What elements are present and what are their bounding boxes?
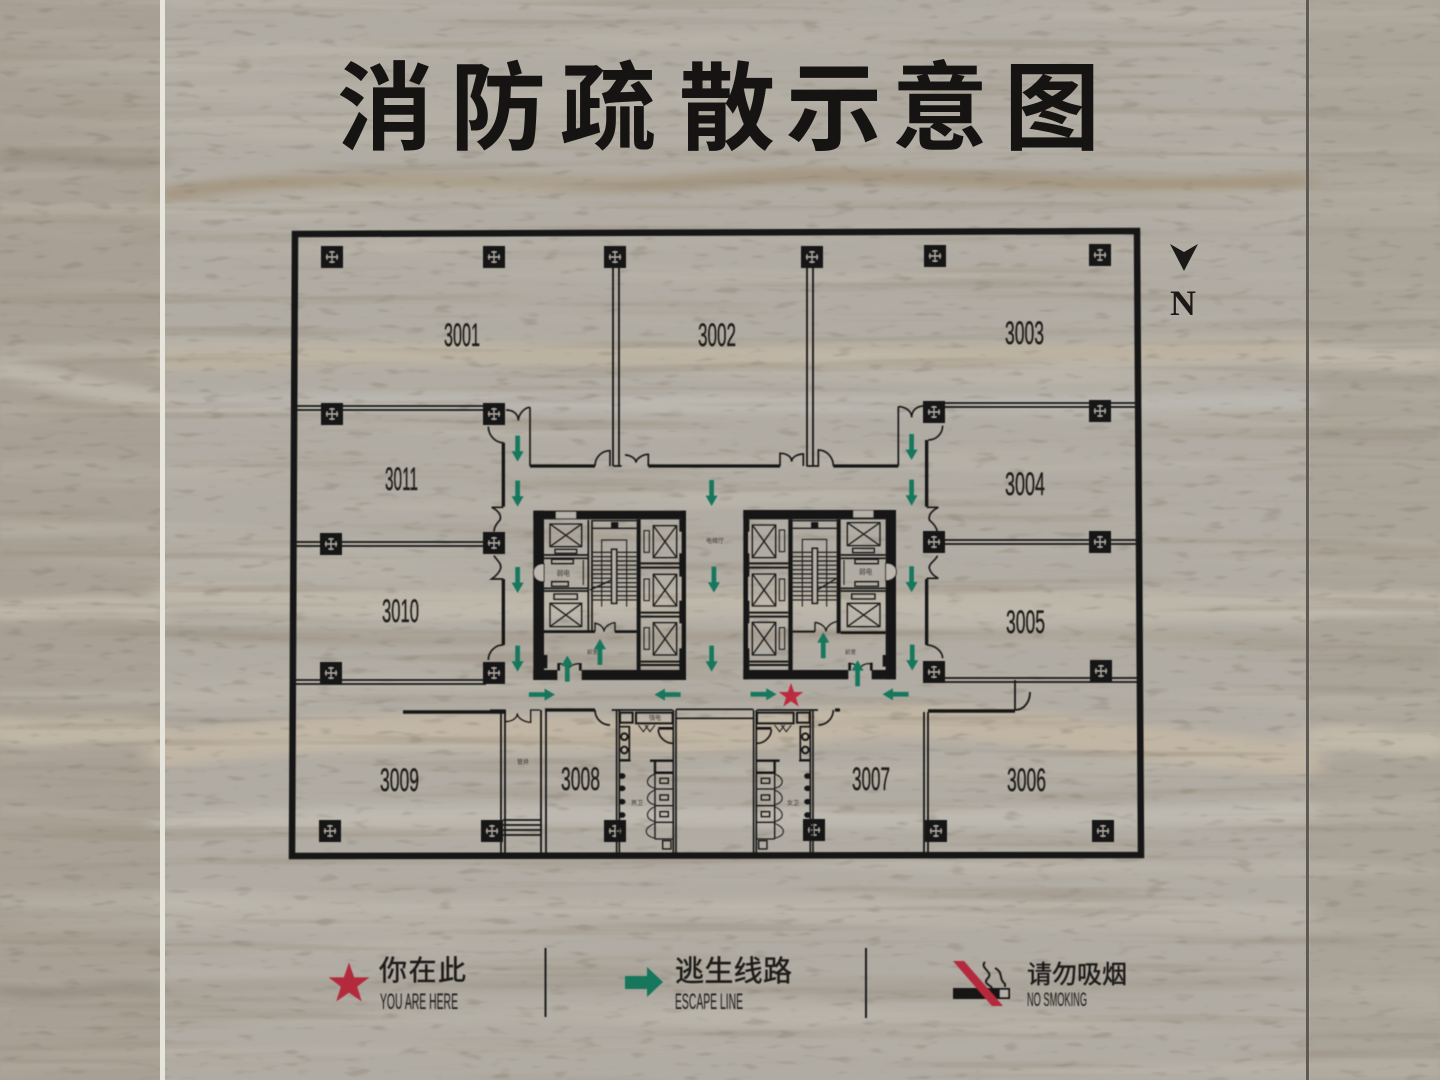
core right top notch <box>853 511 873 517</box>
marble bands <box>0 157 1440 993</box>
left corridor arrows <box>512 436 720 701</box>
legend no smoking chinese: 请勿吸烟 <box>1027 955 1127 991</box>
room 3003: 3003 <box>1005 315 1044 351</box>
north arrowhead <box>1170 244 1198 271</box>
no smoking smoke <box>984 962 1005 988</box>
women's room label: 女卫 <box>787 798 799 807</box>
room 3008: 3008 <box>561 761 600 797</box>
core right labels: 弱电 <box>859 566 873 576</box>
you are here star on plan <box>779 683 803 707</box>
core left thick walls <box>533 511 686 680</box>
floor plan <box>292 231 1141 856</box>
shaft label: 管井 <box>517 757 529 766</box>
room 3006: 3006 <box>1007 762 1046 798</box>
utility label: 强电 <box>649 713 661 722</box>
compass: north indicator <box>1170 244 1198 323</box>
core left side door <box>533 564 544 582</box>
right wall strip <box>1310 0 1440 1080</box>
no smoking cigarette <box>953 988 1010 999</box>
lower corridor wall and restrooms <box>490 709 840 853</box>
lift lobby label: 电梯厅 <box>706 536 724 545</box>
room 3010: 3010 <box>382 593 419 629</box>
no smoking slash <box>953 961 1003 1006</box>
lobby label left: 前室 <box>587 648 599 656</box>
restroom right fixtures <box>754 710 818 853</box>
room numbers: 3011 <box>385 461 418 497</box>
left wall strip <box>0 0 160 1080</box>
corridor walls and doors, left half <box>488 407 720 660</box>
lower corridor wall <box>490 710 540 722</box>
legend: no smoking: NO SMOKING <box>1027 990 1087 1011</box>
north letter: N <box>1170 283 1196 323</box>
legend: you are here: YOU ARE HERE <box>380 989 458 1014</box>
core right thick walls <box>743 510 896 679</box>
legend escape arrow <box>625 967 663 997</box>
elevators left <box>550 524 677 655</box>
legend star icon <box>329 962 369 1001</box>
right corridor arrows <box>751 434 918 700</box>
corridor walls and doors, right half <box>720 406 943 658</box>
partition walls <box>295 257 1137 855</box>
room 3004: 3004 <box>1005 466 1045 502</box>
core: right elevator and stair block <box>743 510 896 679</box>
no smoking filter tip <box>1000 990 1008 997</box>
restroom left fixtures <box>612 710 676 853</box>
outer wall frame <box>292 231 1141 856</box>
room 3001: 3001 <box>444 317 480 353</box>
legend: no smoking <box>953 955 1127 1011</box>
room numbers <box>380 315 1046 798</box>
core left labels: 弱电 <box>557 567 570 577</box>
escape route arrows <box>512 434 918 701</box>
stair right <box>793 523 837 603</box>
room 3007: 3007 <box>852 761 890 797</box>
core left top vent <box>556 512 576 518</box>
men's room label: 男卫 <box>631 798 643 807</box>
core left inner walls <box>544 520 680 672</box>
legend escape chinese: 逃生线路 <box>675 948 792 990</box>
white panel edge <box>160 0 165 1080</box>
legend: escape line <box>625 948 792 1014</box>
legend divider two <box>865 948 867 1018</box>
core right side door <box>886 563 896 581</box>
lobby label right: 前室 <box>845 648 857 656</box>
room 3005: 3005 <box>1006 604 1045 640</box>
legend: you are here <box>329 949 466 1014</box>
legend: escape line: ESCAPE LINE <box>675 989 743 1014</box>
stair left <box>590 523 637 603</box>
elevators right <box>752 523 880 655</box>
structural columns <box>319 244 1114 842</box>
legend you are here chinese: 你在此 <box>379 949 466 989</box>
core: left elevator and stair block <box>533 511 686 680</box>
room 3009: 3009 <box>380 762 419 798</box>
restroom labels <box>517 713 799 807</box>
room 3002: 3002 <box>698 317 736 353</box>
core right inner walls <box>749 521 886 671</box>
legend <box>329 948 1127 1018</box>
title: 消防疏散示意图 <box>337 31 1100 170</box>
legend divider one <box>544 948 546 1017</box>
dark panel joint <box>1306 0 1309 1080</box>
